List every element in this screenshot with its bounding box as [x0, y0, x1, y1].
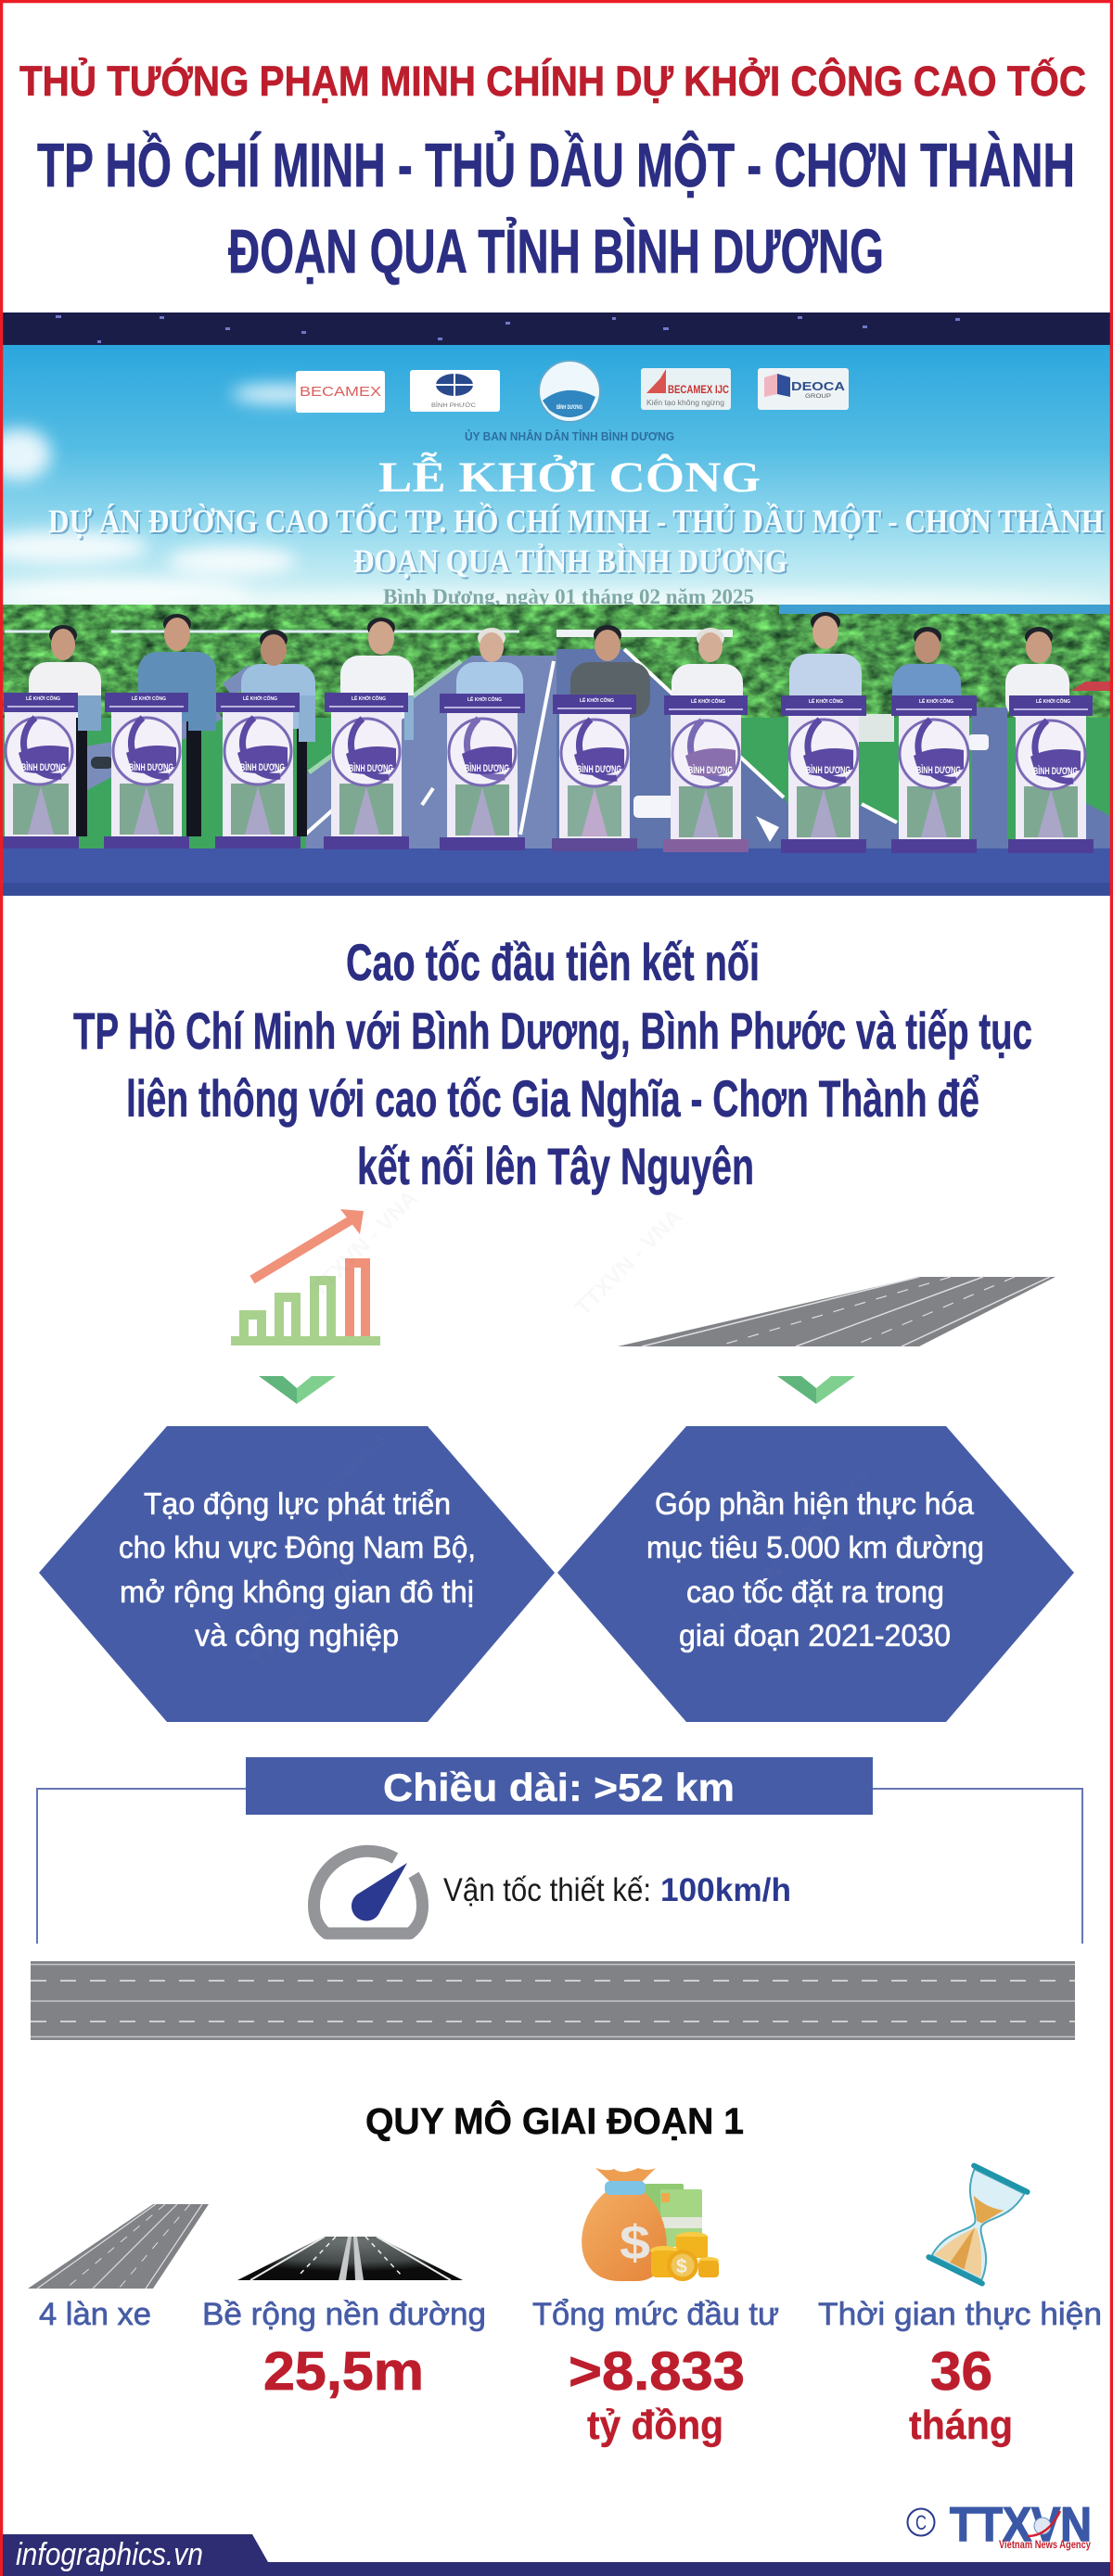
person 9	[892, 627, 961, 720]
podium 3: BÌNH DƯƠNG	[240, 761, 285, 773]
copyright mark: C	[915, 2511, 927, 2534]
logo: Deoca: DEOCA	[791, 379, 846, 393]
watermarks	[246, 1186, 872, 1673]
value: 36	[930, 2341, 992, 2402]
watermarks: TTXVN - VNA	[306, 1186, 423, 1302]
label: Tổng mức đầu tư	[532, 2297, 779, 2332]
logo: Bình Dương emblem: BÌNH DƯƠNG	[556, 403, 582, 411]
screen text: ỦY BAN NHÂN DÂN TỈNH BÌNH DƯƠNG	[465, 429, 674, 443]
wordmark: TTXVN	[950, 2498, 1092, 2552]
subtitle: first expressway connection: Cao tốc đầu tiên kết nối	[346, 933, 760, 991]
podium 8: BÌNH DƯƠNG	[806, 764, 851, 776]
agency name: Vietnam News Agency	[999, 2540, 1091, 2551]
watermarks: INFOGRAPHICS	[780, 1469, 872, 1561]
panel: hexagon development momentum: mở rộng không gian đô thị	[120, 1575, 474, 1609]
podium 6: BÌNH DƯƠNG	[577, 763, 621, 775]
unit: tỷ đồng	[587, 2403, 723, 2448]
title block	[19, 57, 1086, 287]
footer	[3, 2534, 1110, 2576]
icon: money bag with banknotes and coins	[582, 2168, 719, 2281]
footer website: infographics.vn	[16, 2537, 203, 2572]
logo: Becamex: BECAMEX	[300, 384, 381, 400]
unit: tháng	[909, 2403, 1013, 2448]
stage floor	[3, 848, 1110, 896]
podium 4: BÌNH DƯƠNG	[349, 762, 393, 774]
podium 4	[324, 693, 409, 849]
subtitle: first expressway connection	[73, 933, 1032, 1195]
podium 6: LỄ KHỞI CÔNG	[580, 696, 614, 704]
watermarks: TTXVN - VNA	[719, 1511, 836, 1626]
person 8	[789, 612, 862, 719]
logo: Deoca	[758, 368, 849, 410]
ceiling band	[3, 312, 1110, 346]
item: road width	[202, 2237, 486, 2402]
design speed text: Vận tốc thiết kế:	[443, 1872, 651, 1908]
officials standing behind podiums	[29, 612, 1069, 836]
podium 9: LỄ KHỞI CÔNG	[919, 697, 953, 705]
watermarks: TTXVN - VNA	[246, 1557, 363, 1673]
podium 4: LỄ KHỞI CÔNG	[352, 695, 386, 702]
LED screen sky	[0, 345, 1110, 608]
podium 7	[663, 695, 748, 852]
person 1	[29, 625, 101, 731]
podium 7: LỄ KHỞI CÔNG	[691, 697, 725, 705]
podium 9: BÌNH DƯƠNG	[916, 764, 961, 776]
podium 3: LỄ KHỞI CÔNG	[243, 695, 277, 702]
icon: green chevron left	[259, 1376, 336, 1404]
logo: Becamex IJC: BECAMEX IJC	[668, 383, 729, 396]
copyright mark	[907, 2509, 935, 2535]
panel: hexagon 5,000 km target: cao tốc đặt ra trong	[686, 1575, 944, 1609]
person 2	[138, 614, 216, 731]
podium 8	[781, 695, 866, 853]
logo: Becamex IJC	[641, 368, 731, 410]
podium 10	[1008, 695, 1094, 853]
podium 3	[215, 693, 301, 848]
icon: hourglass	[925, 2162, 1031, 2288]
screen text: Bình Dương, ngày 01 tháng 02 năm 2025	[383, 585, 754, 608]
panel: hexagon development momentum: và công nghiệp	[195, 1618, 399, 1652]
podium 2: LỄ KHỞI CÔNG	[132, 695, 166, 702]
logo: Bình Phước: BÌNH PHƯỚC	[431, 402, 477, 409]
podium 2: BÌNH DƯƠNG	[129, 761, 173, 773]
item: 4 lanes	[28, 2204, 209, 2332]
watermarks: INFOGRAPHICS	[298, 1432, 390, 1524]
frame	[37, 1789, 1082, 1944]
panel: hexagon 5,000 km target: mục tiêu 5.000 km đường	[646, 1530, 984, 1564]
person 10	[1005, 627, 1069, 720]
label: Bề rộng nền đường	[202, 2297, 486, 2332]
screen landscape and road	[3, 605, 1110, 853]
subtitle: first expressway connection: kết nối lên Tây Nguyên	[357, 1137, 754, 1195]
icon: growth bar chart with arrow	[231, 1209, 380, 1345]
value: 25,5m	[263, 2341, 424, 2402]
podium 5: BÌNH DƯƠNG	[465, 762, 509, 774]
podium 9	[891, 695, 977, 853]
banner: length: Chiều dài: >52 km	[383, 1766, 735, 1809]
heading: phase 1 scale: QUY MÔ GIAI ĐOẠN 1	[365, 2099, 744, 2142]
value: >8.833	[569, 2341, 745, 2402]
podium 10: LỄ KHỞI CÔNG	[1036, 697, 1070, 705]
podium 10: BÌNH DƯƠNG	[1033, 765, 1078, 777]
icon: speedometer	[313, 1851, 423, 1933]
design speed text	[443, 1872, 791, 1908]
podium 6	[552, 695, 637, 851]
icon: money bag with banknotes and coins: $	[676, 2256, 687, 2277]
icon: money bag with banknotes and coins: $	[620, 2216, 650, 2270]
panel: hexagon 5,000 km target: Góp phần hiện thực hóa	[655, 1486, 975, 1521]
icon: green chevron right	[777, 1376, 855, 1404]
panel: length and design speed	[37, 1757, 1082, 1944]
podiums row	[3, 693, 1094, 853]
logo: Deoca: GROUP	[805, 394, 831, 400]
road strip	[31, 1961, 1075, 2040]
podium 7: BÌNH DƯƠNG	[688, 764, 733, 776]
banner: length	[246, 1757, 873, 1815]
screen text: LỄ KHỞI CÔNG	[378, 453, 761, 502]
item: duration	[818, 2162, 1102, 2448]
screen text	[48, 429, 1106, 608]
panel: hexagon development momentum	[39, 1426, 555, 1722]
person 6	[570, 625, 650, 718]
person 5	[456, 628, 523, 718]
podium 1: LỄ KHỞI CÔNG	[26, 695, 60, 702]
panel: hexagon development momentum: Tạo động lực phát triển	[144, 1486, 451, 1521]
person 4	[340, 618, 414, 740]
globe mark	[1028, 2511, 1060, 2536]
icon: road in perspective	[618, 1277, 1055, 1346]
photo: groundbreaking ceremony	[0, 312, 1110, 896]
label: Thời gian thực hiện	[818, 2297, 1102, 2332]
watermarks: TTXVN - VNA	[570, 1205, 687, 1320]
screen text: ĐOẠN QUA TỈNH BÌNH DƯƠNG	[355, 544, 789, 581]
person 3	[241, 630, 315, 742]
logo: TTXVN copyright	[907, 2498, 1092, 2552]
panel: hexagon 5,000 km target	[557, 1426, 1074, 1722]
podium 5: LỄ KHỞI CÔNG	[467, 695, 502, 703]
icon: black highway	[237, 2237, 463, 2280]
podium 1	[3, 693, 79, 848]
design speed text: 100km/h	[660, 1872, 791, 1908]
label: 4 làn xe	[39, 2297, 151, 2332]
screen text: ĐOẠN QUA TỈNH BÌNH DƯƠNG	[353, 542, 787, 580]
logo: Bình Dương emblem	[539, 361, 600, 422]
panel: hexagon 5,000 km target: giai đoạn 2021-2030	[679, 1618, 951, 1652]
podium 8: LỄ KHỞI CÔNG	[809, 697, 843, 705]
logo: Bình Phước	[410, 370, 500, 412]
panel: hexagon development momentum: cho khu vực Đông Nam Bộ,	[119, 1530, 476, 1564]
trousers	[76, 712, 307, 836]
screen logos	[296, 361, 849, 422]
item: total investment	[532, 2168, 779, 2448]
person 7	[672, 628, 743, 720]
logo: Becamex	[296, 371, 385, 413]
logo: Becamex IJC: Kiến tạo không ngừng	[646, 399, 724, 407]
icon: road 4 lanes	[28, 2204, 209, 2289]
podium 2	[104, 693, 189, 848]
podium 5	[440, 694, 525, 850]
podium 1: BÌNH DƯƠNG	[21, 761, 66, 773]
